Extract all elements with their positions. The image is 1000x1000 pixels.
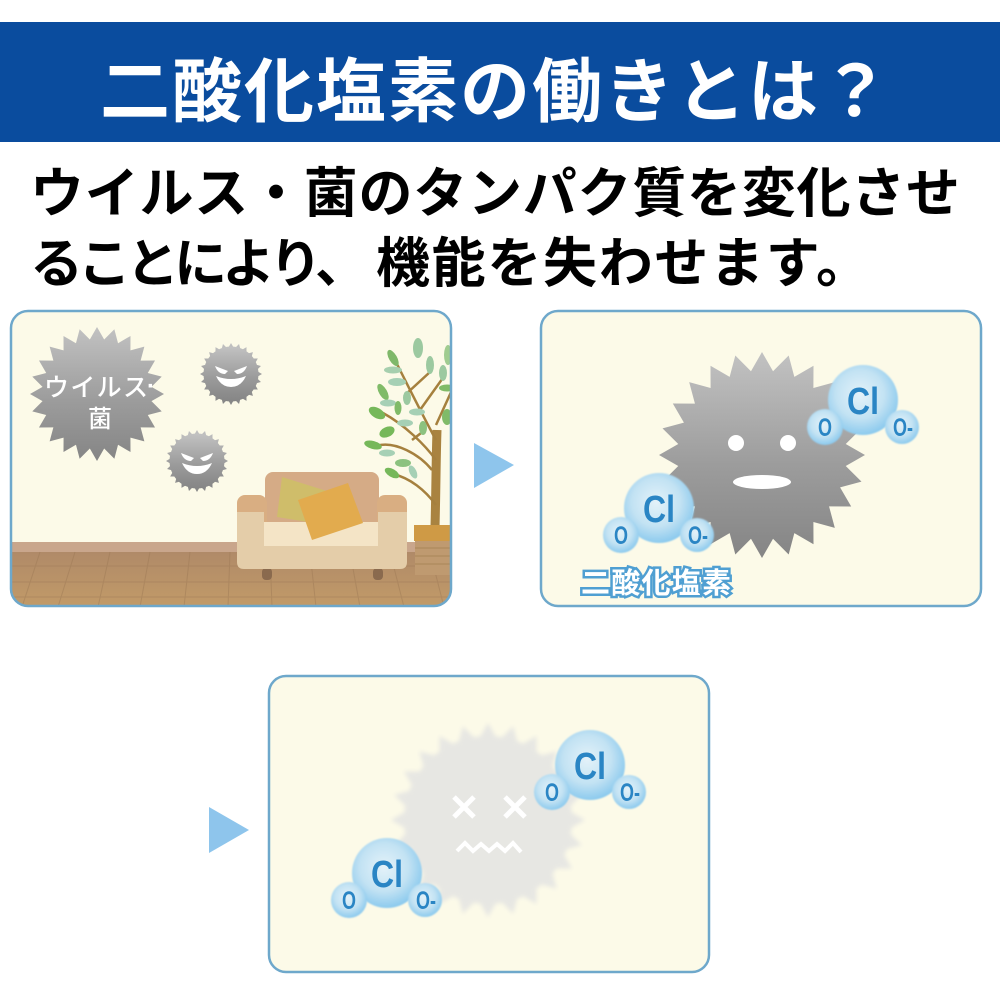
chlorine dioxide molecule: Cl (574, 746, 606, 788)
room floor (10, 542, 452, 608)
title banner (0, 22, 1000, 142)
chlorine dioxide molecule: O- (416, 887, 436, 915)
panel: room with viruses (10, 311, 455, 608)
chlorine dioxide molecule (603, 473, 714, 553)
chlorine dioxide molecule: O (342, 887, 356, 915)
chlorine dioxide molecule (807, 365, 919, 445)
virus with label: 菌 (88, 406, 112, 433)
title banner: 二酸化塩素の働きとは？ (100, 53, 890, 131)
plant (363, 338, 455, 575)
chlorine dioxide molecule (331, 838, 442, 918)
chlorine dioxide molecule: O- (620, 779, 640, 807)
sofa (237, 472, 407, 580)
virus with label: · (147, 373, 155, 400)
panel: inactivated virus (269, 676, 709, 972)
virus with label: ウイルス (44, 374, 148, 402)
faded virus with dead face (391, 723, 585, 917)
chlorine dioxide molecule: O (818, 414, 832, 442)
chlorine dioxide molecule: Cl (847, 381, 879, 423)
small virus with evil face (200, 343, 262, 405)
chlorine dioxide molecule: Cl (371, 854, 403, 896)
chlorine dioxide molecule: O- (688, 522, 708, 550)
subtitle text: ウイルス・菌のタンパク質を変化させ (30, 164, 960, 224)
large virus with worried face (659, 352, 865, 558)
panel: chlorine dioxide attacking virus (541, 311, 981, 606)
chlorine dioxide molecule (534, 730, 646, 810)
subtitle text: ることにより、 (30, 235, 368, 294)
subtitle text (30, 164, 960, 294)
arrow (474, 443, 514, 488)
virus with label (30, 327, 164, 461)
arrow (209, 807, 249, 853)
chlorine dioxide molecule: O (545, 779, 559, 807)
chlorine dioxide molecule: Cl (643, 489, 675, 531)
chlorine dioxide molecule: O- (893, 414, 913, 442)
chlorine dioxide molecule: O (614, 522, 628, 550)
small virus with evil face (166, 430, 228, 492)
chlorine dioxide label: 二酸化塩素 (581, 567, 731, 600)
subtitle text: 機能を失わせます。 (376, 234, 870, 294)
